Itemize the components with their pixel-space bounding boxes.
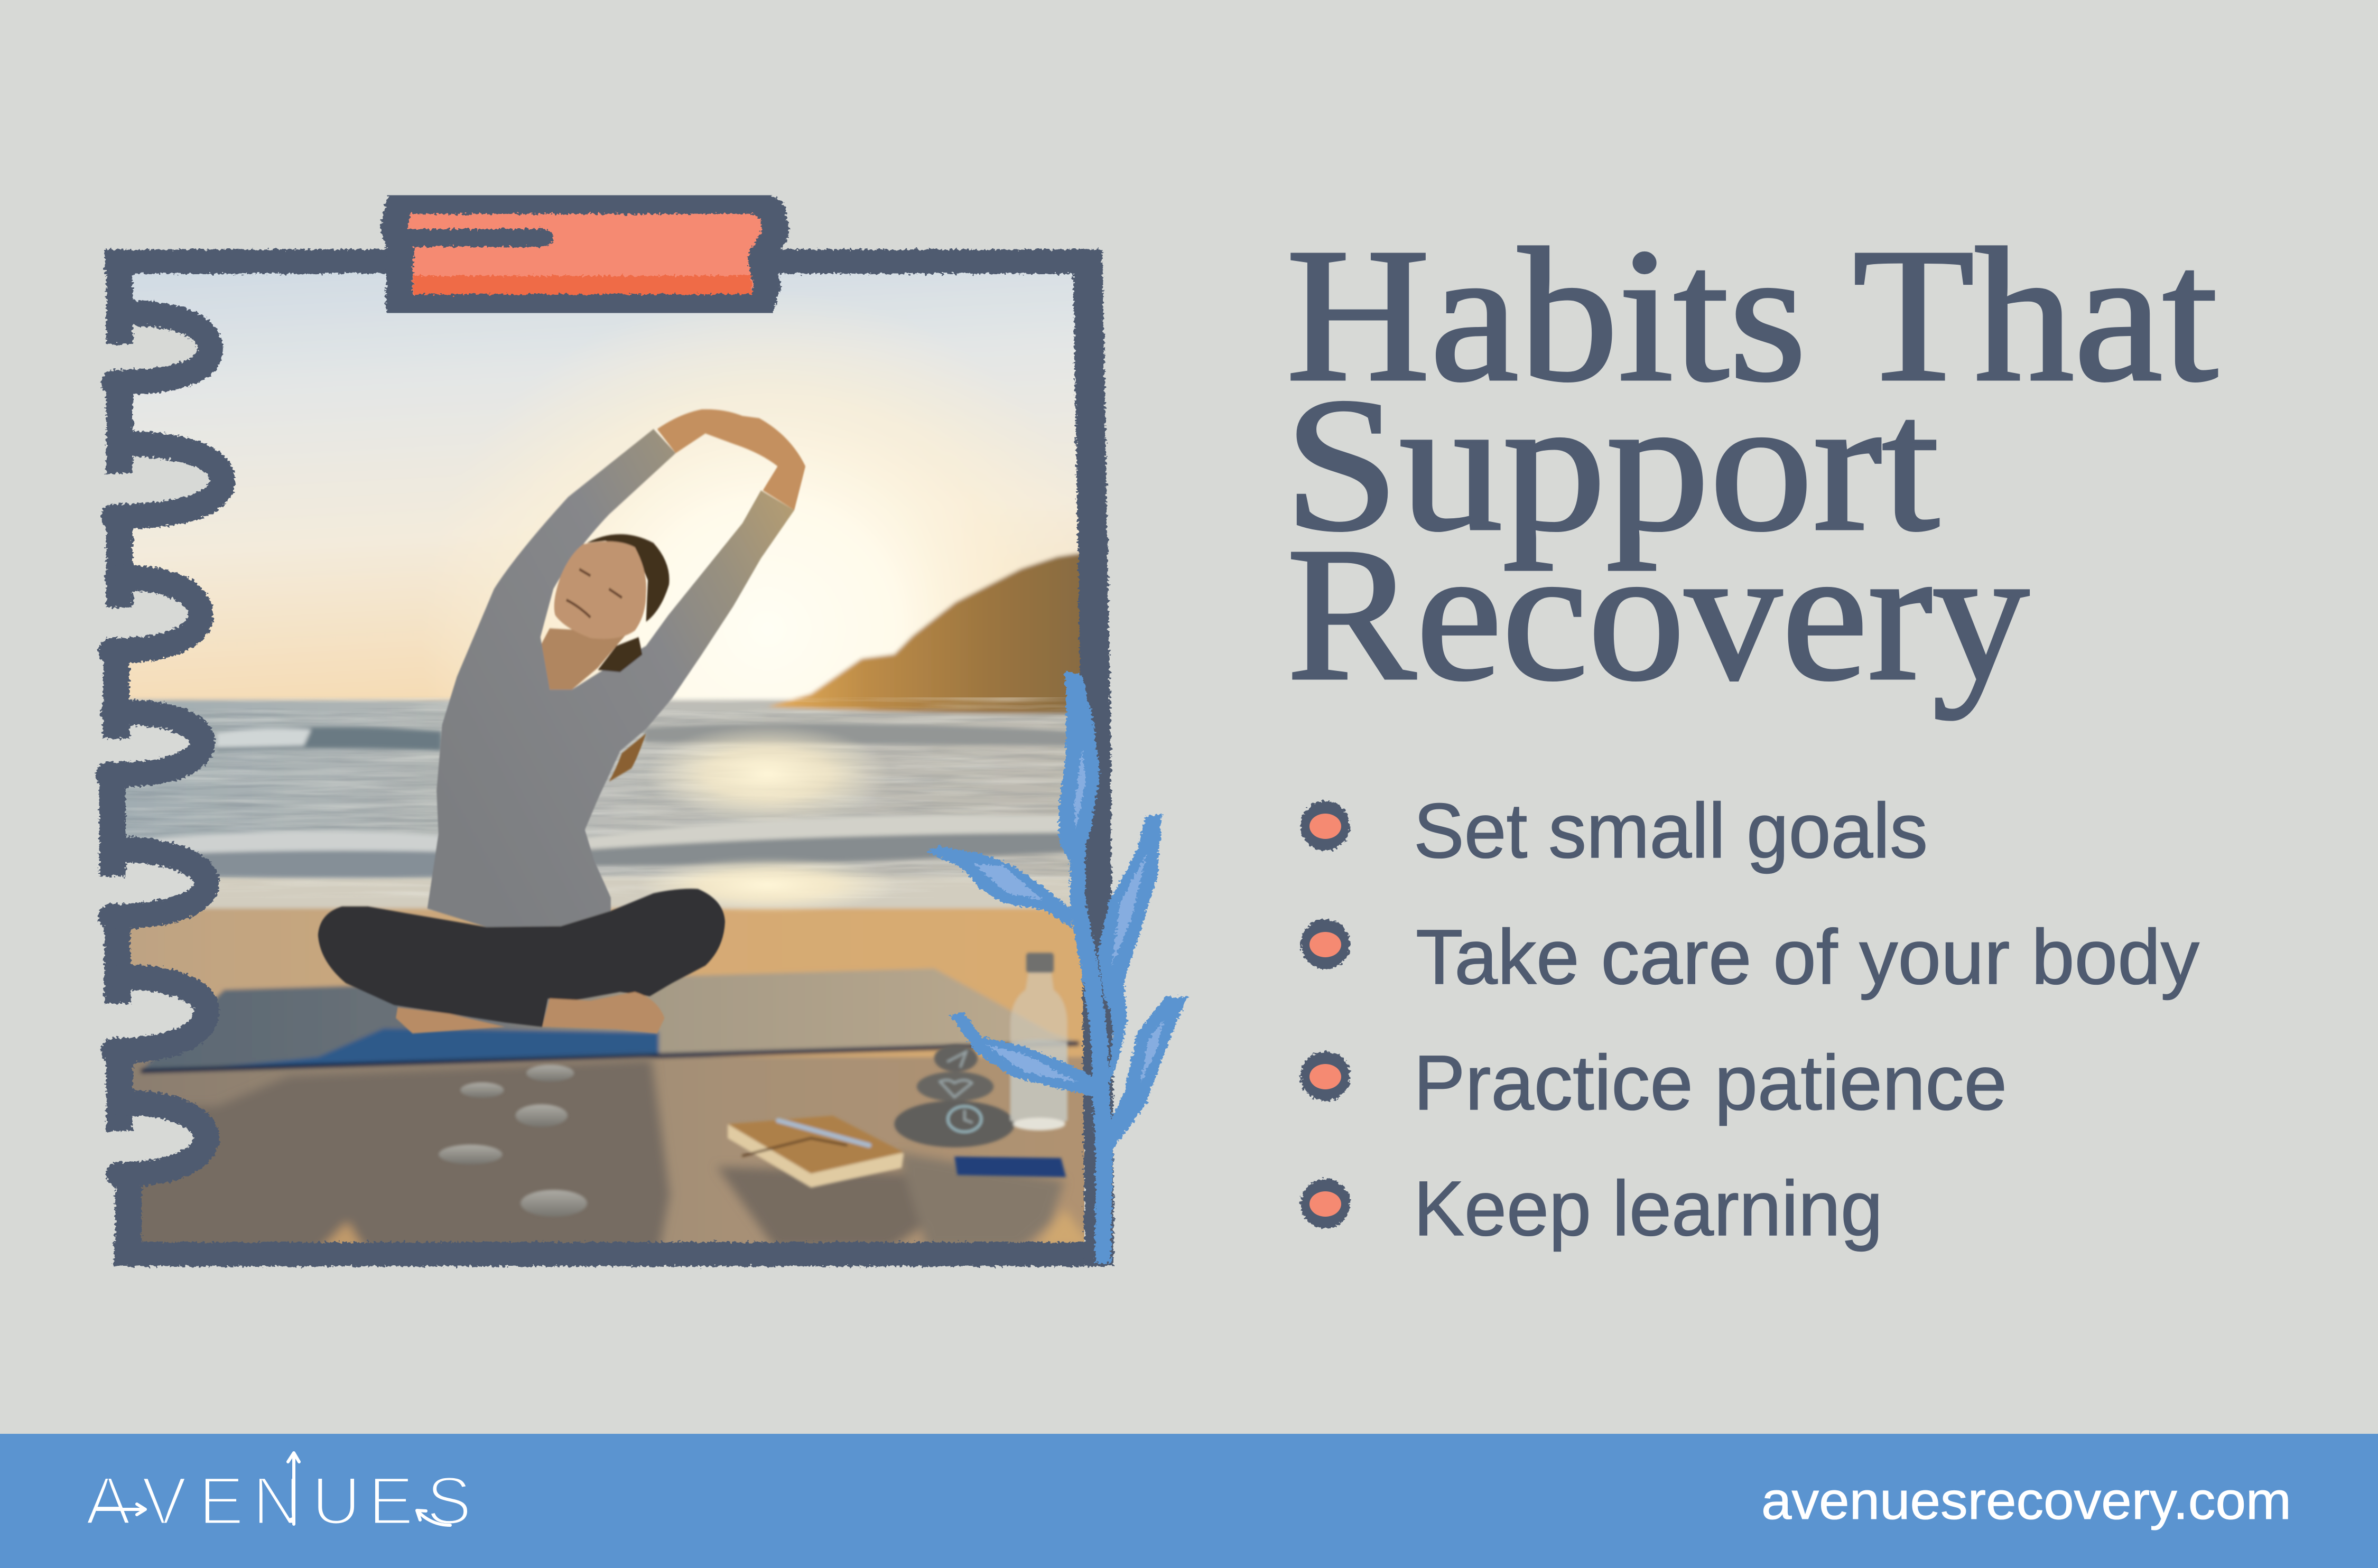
plant stem and leaves: [926, 671, 1187, 1263]
hair: [587, 534, 670, 672]
plant illustration: [926, 671, 1187, 1263]
title: Recovery: [1287, 508, 2029, 720]
bullet list: [1301, 788, 2199, 1252]
logo: Avenues wordmark with arrows: AVENUES: [86, 1463, 471, 1539]
feet: [396, 992, 665, 1033]
notebook and pen: [728, 1116, 904, 1188]
tape tab at top of frame: [394, 201, 776, 307]
bullet: Practice patience: Practice patience: [1414, 1040, 2007, 1126]
grey shirt: [428, 429, 794, 927]
tab outline: [394, 201, 776, 307]
bullet: Set small goals: Set small goals: [1414, 788, 1928, 874]
props on the sand: [439, 953, 1067, 1217]
website url: avenuesrecovery.com: [1761, 1471, 2291, 1530]
stacked stones with chalk icons: [894, 1045, 1015, 1147]
title: Habits That: [1286, 209, 2218, 421]
snack bar: [954, 1156, 1066, 1177]
leggings: [318, 889, 725, 1027]
paper holes inside the spiral hooks: [103, 313, 222, 1174]
neck: [541, 628, 627, 689]
title: [1284, 209, 2218, 720]
face: [554, 542, 646, 639]
beach scenery: [108, 254, 1122, 1255]
eyes and mouth: [566, 569, 622, 618]
title: Support: [1284, 359, 1940, 571]
water bottle: [1010, 953, 1067, 1131]
cast shadows on the sand: [123, 1059, 1093, 1252]
darker orange band: [413, 276, 751, 300]
breaking waves and sun reflections: [137, 723, 1072, 913]
notebook frame with spiral hooks: [105, 249, 1104, 1266]
arms and hands: [657, 409, 805, 510]
sea wave texture: [123, 697, 1084, 898]
bullet: Take care of your body: Take care of your body: [1416, 914, 2199, 1001]
footer band: [0, 1434, 2378, 1568]
sea wave shadows: [123, 708, 1084, 877]
pebbles: [439, 1065, 587, 1217]
bullet: Keep learning: Keep learning: [1414, 1165, 1883, 1252]
tongue stroke: [407, 229, 544, 247]
photo: woman stretching on a beach at sunrise: [108, 254, 1122, 1255]
salmon tape fill: [407, 203, 766, 301]
woman in seated side-stretch pose: [318, 409, 805, 1033]
ponytail lower: [609, 733, 646, 782]
leaf highlights: [974, 749, 1164, 1082]
